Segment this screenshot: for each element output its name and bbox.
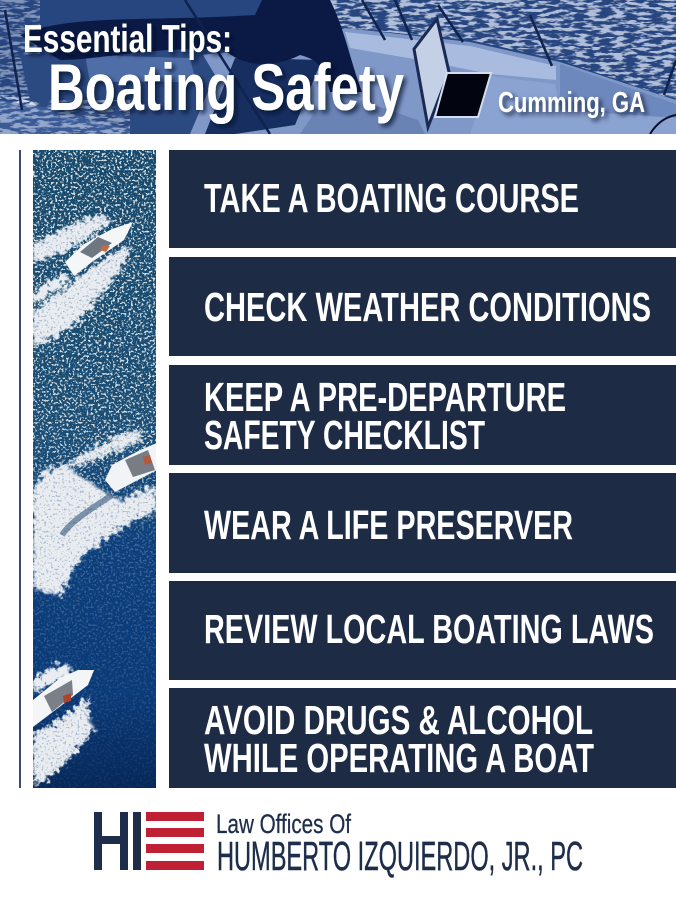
boat 1 <box>65 222 133 276</box>
header banner <box>0 0 676 134</box>
heading: Boating Safety: Boating Safety <box>48 50 404 124</box>
hatch <box>414 19 449 127</box>
panel: review local boating laws <box>169 581 676 680</box>
side photo: boats on water <box>33 150 157 790</box>
logo mark: HI with stripes <box>94 812 204 870</box>
heading: Essential Tips: Essential Tips: <box>23 18 232 61</box>
vertical rule <box>19 150 21 788</box>
firm name: Law Offices Of <box>216 809 351 839</box>
banner photo: sailboat deck <box>0 0 676 134</box>
boats <box>33 222 157 727</box>
panel: take a boating course <box>169 150 676 248</box>
boat 3 <box>33 670 94 727</box>
panel: pre-departure checklist: SAFETY CHECKLIST <box>204 412 485 458</box>
panel: check weather conditions <box>169 257 676 356</box>
boat 2 <box>105 443 157 492</box>
wakes <box>33 216 156 785</box>
logo <box>94 809 583 879</box>
wake speckle <box>33 210 156 790</box>
panel: avoid drugs and alcohol <box>169 688 676 788</box>
panel: wear a life preserver <box>169 473 676 573</box>
panel: pre-departure checklist <box>169 365 676 465</box>
